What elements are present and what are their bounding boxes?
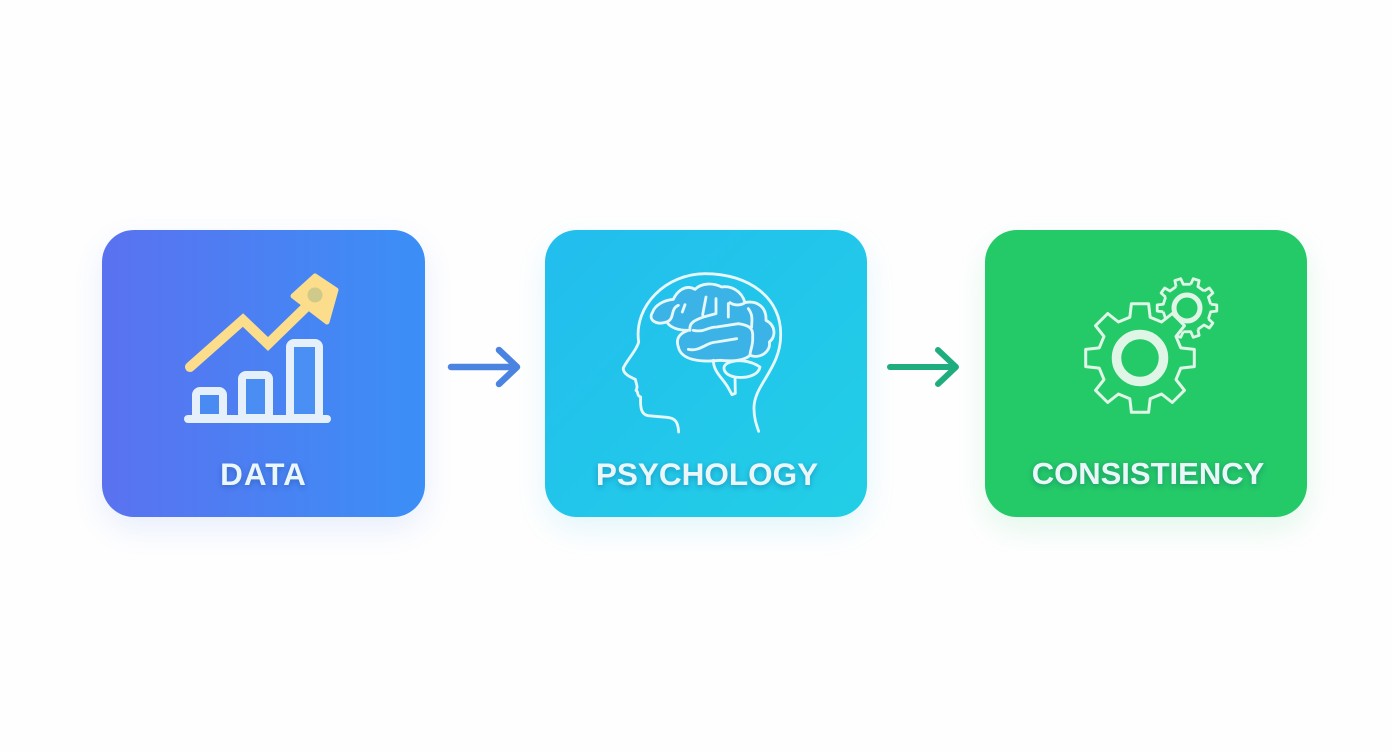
bar one xyxy=(196,391,223,418)
icon: head with brain xyxy=(623,274,781,432)
head outline xyxy=(623,274,781,432)
bar two xyxy=(242,375,269,418)
chart baseline xyxy=(184,415,331,423)
panel: psychology card xyxy=(545,230,867,517)
bar three xyxy=(290,343,319,418)
arrow head xyxy=(293,276,336,322)
icon: bar chart with rising arrow xyxy=(184,276,336,423)
brain outline xyxy=(651,284,774,361)
rising arrow line xyxy=(190,308,305,367)
arrow: data to psychology xyxy=(451,350,517,384)
arrow head dot xyxy=(308,288,322,302)
cerebellum and stem xyxy=(713,360,760,395)
brain folds xyxy=(667,297,753,355)
heading: DATA: DATA xyxy=(220,456,307,492)
icon: gears xyxy=(1086,276,1218,412)
panel: data card xyxy=(102,230,425,517)
large gear xyxy=(1086,304,1194,412)
heading: CONSISTIENCY: CONSISTIENCY xyxy=(1032,456,1264,491)
heading: PSYCHOLOGY: PSYCHOLOGY xyxy=(596,456,818,492)
arrow: psychology to consistency xyxy=(890,350,956,384)
small gear xyxy=(1156,276,1218,340)
panel: consistency card xyxy=(985,230,1307,517)
